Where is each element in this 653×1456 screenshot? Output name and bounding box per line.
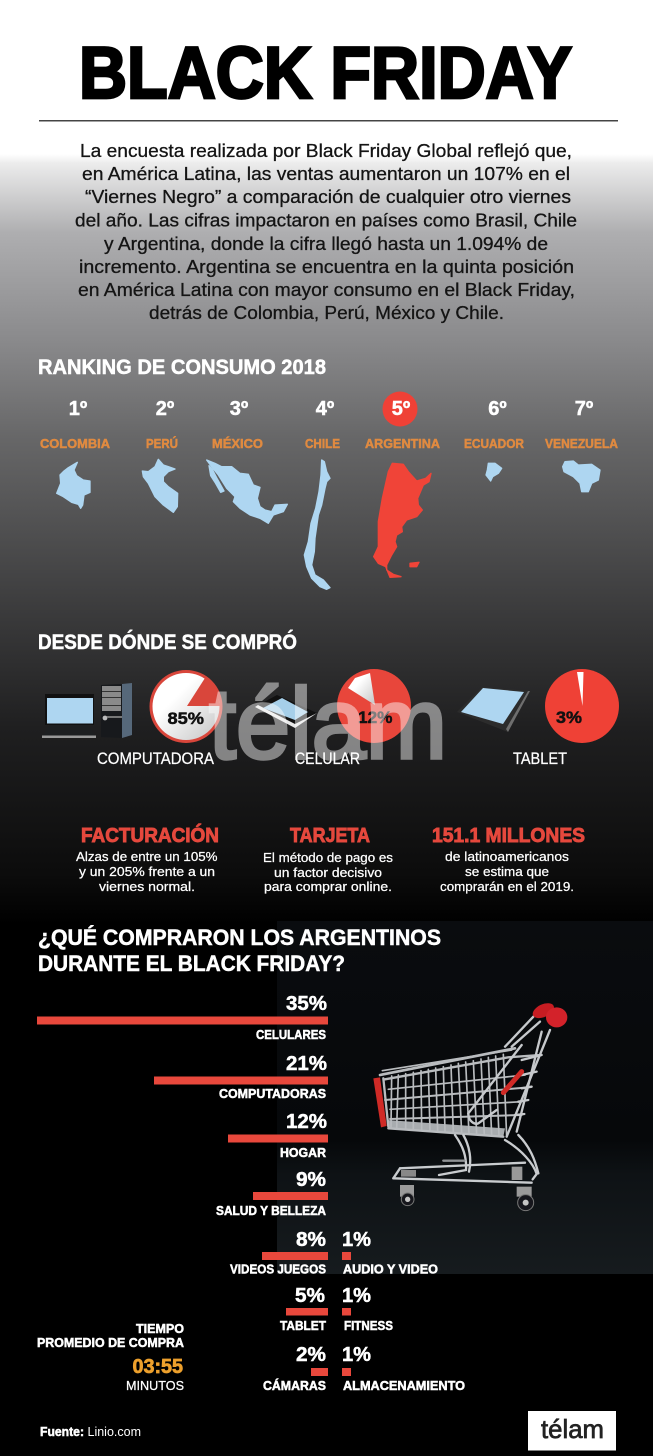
fact: millones bbox=[432, 825, 585, 894]
bar: computadoras: 21% bbox=[286, 1053, 327, 1075]
logo: telam bbox=[528, 1411, 616, 1450]
fact: facturacion: y un 205% frente a un bbox=[79, 864, 215, 879]
intro text block: en América Latina con mayor consumo en el Black Friday, bbox=[78, 279, 575, 300]
map: ecuador bbox=[486, 463, 502, 481]
bar: tablet bbox=[280, 1285, 328, 1333]
fact: tarjeta: para comprar online. bbox=[264, 879, 392, 894]
bar: audio y video bbox=[342, 1229, 438, 1276]
country names: COLOMBIA bbox=[40, 436, 111, 451]
bar: celulares: CELULARES bbox=[256, 1028, 326, 1042]
intro text block: y Argentina, donde la cifra llegó hasta un 1.094% de bbox=[104, 233, 548, 254]
bar: salud y belleza bbox=[216, 1169, 328, 1218]
bar chart: left column bbox=[37, 993, 328, 1393]
rank numbers: 4º bbox=[316, 398, 334, 420]
pie chart: celular 12%: 12% bbox=[358, 708, 392, 727]
cart red parts bbox=[373, 1000, 567, 1127]
bar: camaras: 2% bbox=[296, 1344, 326, 1366]
bar: videos juegos: VIDEOS JUEGOS bbox=[230, 1262, 326, 1276]
bar: celulares: 35% bbox=[286, 993, 327, 1015]
fact: tarjeta: El método de pago es bbox=[263, 850, 394, 865]
map: peru bbox=[142, 459, 178, 512]
rank numbers: 6º bbox=[488, 398, 507, 420]
heading: que compraron: ¿QUÉ COMPRARON LOS ARGENTINOS bbox=[38, 925, 441, 950]
device labels: TABLET bbox=[513, 750, 567, 768]
bar: fitness bbox=[342, 1285, 393, 1333]
rank numbers: 2º bbox=[156, 398, 174, 420]
cart wheels bbox=[401, 1193, 534, 1211]
intro text block: incremento. Argentina se encuentra en la quinta posición bbox=[79, 256, 574, 277]
bar: hogar: 12% bbox=[286, 1111, 327, 1133]
title: BLACK FRIDAY bbox=[79, 33, 572, 114]
bar: almacenamiento bbox=[342, 1344, 465, 1393]
pie chart: tablet 3%: 3% bbox=[556, 708, 582, 727]
pie chart: celular 12% bbox=[337, 669, 411, 743]
bar: camaras bbox=[263, 1344, 328, 1393]
bar: computadoras: COMPUTADORAS bbox=[219, 1087, 326, 1101]
bar: tablet: 5% bbox=[295, 1285, 325, 1307]
country names: VENEZUELA bbox=[545, 436, 619, 451]
fact: tarjeta: un factor decisivo bbox=[274, 865, 382, 880]
device labels: CELULAR bbox=[295, 750, 360, 768]
bar: hogar bbox=[228, 1111, 328, 1160]
rank numbers: 1º bbox=[69, 398, 87, 420]
bar: almacenamiento: ALMACENAMIENTO bbox=[343, 1379, 465, 1393]
country names: ARGENTINA bbox=[365, 436, 441, 451]
source: Linio.com bbox=[88, 1425, 141, 1439]
highlight circle 5º bbox=[382, 392, 418, 426]
logo: telam: télam bbox=[541, 1414, 604, 1444]
fact: facturacion bbox=[76, 823, 219, 894]
pie chart: computadora 85%: 85% bbox=[168, 709, 204, 728]
device labels: COMPUTADORA bbox=[97, 750, 214, 768]
rank numbers: 5º bbox=[392, 398, 410, 420]
intro text block: en América Latina, las ventas aumentaron un 107% en el bbox=[82, 163, 570, 184]
device labels bbox=[97, 750, 567, 768]
rank numbers: 3º bbox=[230, 398, 248, 420]
map: chile bbox=[304, 460, 330, 589]
heading: que compraron bbox=[38, 925, 441, 976]
fact: facturacion: Alzas de entre un 105% bbox=[76, 849, 218, 864]
bar chart: right column bbox=[342, 1229, 465, 1393]
map: argentina bbox=[374, 463, 431, 577]
cart handle frame bbox=[468, 1017, 550, 1137]
map: colombia bbox=[57, 462, 90, 508]
bar: tablet: TABLET bbox=[280, 1319, 326, 1333]
callout: tiempo promedio de compra: 03:55 bbox=[132, 1356, 183, 1378]
intro text block bbox=[75, 140, 577, 323]
fact: facturacion: viernes normal. bbox=[99, 879, 195, 894]
map: mexico bbox=[207, 460, 287, 523]
bar: audio y video: 1% bbox=[342, 1229, 371, 1251]
bar: computadoras bbox=[154, 1053, 328, 1101]
bar: camaras: CÁMARAS bbox=[263, 1378, 326, 1393]
country names: CHILE bbox=[305, 436, 340, 451]
bar: hogar: HOGAR bbox=[280, 1146, 326, 1160]
source bbox=[40, 1425, 141, 1439]
fact: millones: se estima que bbox=[465, 864, 549, 879]
cart basket wires bbox=[380, 1048, 540, 1137]
intro text block: detrás de Colombia, Perú, México y Chile. bbox=[149, 302, 504, 323]
fact: facturacion: FACTURACIÓN bbox=[81, 823, 219, 847]
callout: tiempo promedio de compra bbox=[37, 1322, 184, 1393]
heading: ranking: RANKING DE CONSUMO 2018 bbox=[38, 356, 326, 379]
bar: fitness: 1% bbox=[342, 1285, 371, 1307]
bar: audio y video: AUDIO Y VIDEO bbox=[343, 1262, 438, 1276]
source: Fuente: bbox=[40, 1425, 84, 1439]
country names: ECUADOR bbox=[464, 436, 525, 451]
bar: salud y belleza: 9% bbox=[296, 1169, 326, 1191]
icon: desktop computer bbox=[42, 683, 132, 738]
intro text block: La encuesta realizada por Black Friday Global reflejó que, bbox=[80, 140, 572, 161]
intro text block: del año. Las cifras impactaron en países como Brasil, Chile bbox=[75, 210, 577, 230]
photo: shopping cart bbox=[277, 921, 653, 1274]
bar: celulares bbox=[37, 993, 328, 1042]
intro text block: “Viernes Negro” a comparación de cualquier otro viernes bbox=[85, 186, 571, 207]
pie chart: tablet 3% bbox=[545, 669, 619, 743]
heading: que compraron: DURANTE EL BLACK FRIDAY? bbox=[38, 951, 345, 976]
callout: tiempo promedio de compra: TIEMPO bbox=[136, 1322, 184, 1336]
bar: videos juegos: 8% bbox=[296, 1229, 326, 1251]
cart basket tray bbox=[387, 1120, 505, 1137]
heading: desde donde se compro: DESDE DÓNDE SE COMPRÓ bbox=[38, 630, 297, 654]
bar: videos juegos bbox=[230, 1229, 328, 1276]
fact: tarjeta: TARJETA bbox=[290, 825, 370, 847]
panel: ranking de consumo bbox=[40, 392, 619, 589]
watermark: telam: télam bbox=[209, 668, 447, 780]
rank numbers bbox=[69, 398, 593, 420]
cart legs and base bbox=[393, 1135, 538, 1183]
fact: millones: de latinoamericanos bbox=[445, 849, 570, 864]
country names bbox=[40, 436, 619, 451]
icon: tablet bbox=[457, 687, 530, 732]
country names: MÉXICO bbox=[212, 436, 263, 451]
bar: almacenamiento: 1% bbox=[342, 1344, 371, 1366]
icon: phone bbox=[255, 695, 317, 728]
country names: PERÚ bbox=[146, 436, 178, 451]
fact: millones: comprarán en el 2019. bbox=[440, 879, 574, 894]
pie chart: computadora 85% bbox=[150, 670, 222, 743]
fact: tarjeta bbox=[263, 825, 394, 894]
fact: millones: 151.1 MILLONES bbox=[432, 825, 585, 847]
rank numbers: 7º bbox=[575, 398, 593, 420]
callout: tiempo promedio de compra: MINUTOS bbox=[126, 1378, 184, 1393]
bar: fitness: FITNESS bbox=[344, 1319, 393, 1333]
callout: tiempo promedio de compra: PROMEDIO DE COMPRA bbox=[37, 1336, 184, 1350]
bar: salud y belleza: SALUD Y BELLEZA bbox=[216, 1204, 326, 1218]
map: venezuela bbox=[563, 461, 600, 492]
